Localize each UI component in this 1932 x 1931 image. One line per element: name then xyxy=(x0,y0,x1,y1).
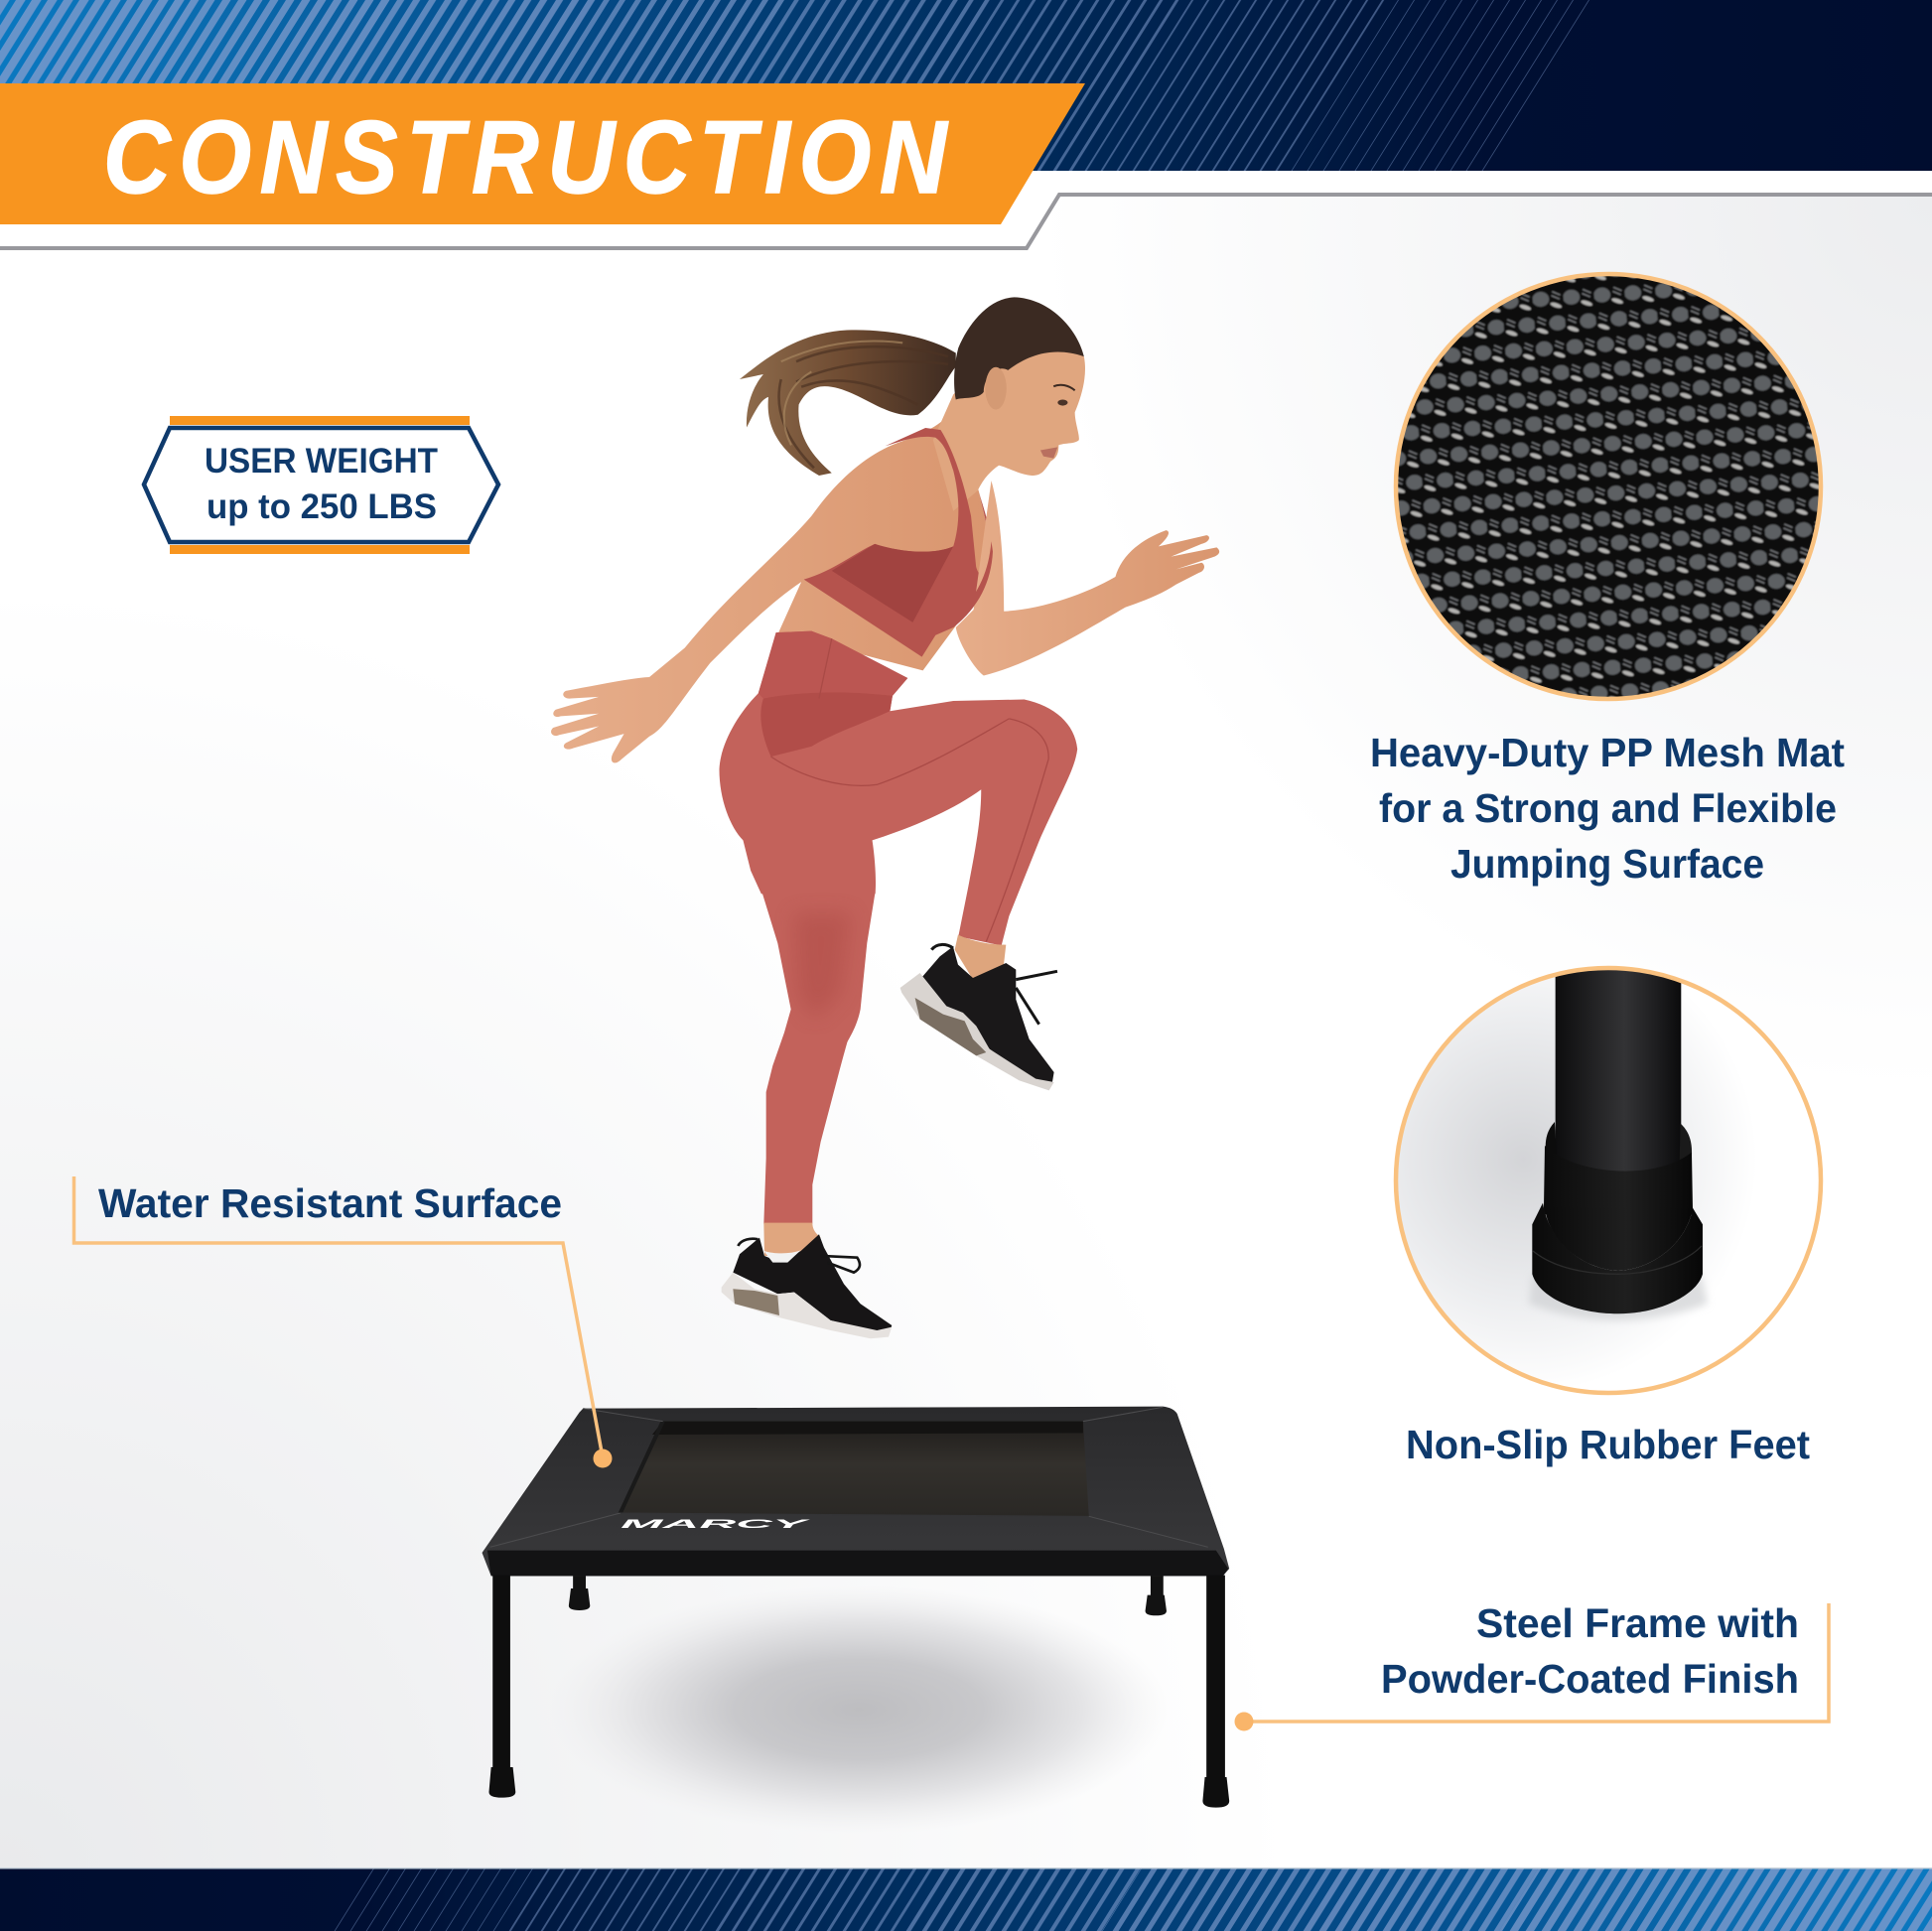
label: mesh mat: Jumping Surface xyxy=(1450,841,1764,887)
badge: user weight xyxy=(144,416,498,554)
label: mesh mat: Heavy-Duty PP Mesh Mat xyxy=(1370,730,1845,775)
label: steel frame: Powder-Coated Finish xyxy=(1381,1656,1799,1702)
footer banner with diagonal stripes xyxy=(0,1867,1932,1931)
trampoline: MARCY xyxy=(621,1517,810,1531)
badge: user weight: USER WEIGHT xyxy=(205,442,438,481)
label: steel frame xyxy=(1381,1600,1799,1702)
woman jumping xyxy=(551,297,1219,1338)
callout dot: steel frame xyxy=(1235,1712,1253,1731)
badge: user weight: up to 250 LBS xyxy=(207,487,437,526)
callout line: water resistant surface xyxy=(73,1176,603,1457)
title ribbon xyxy=(0,83,1085,224)
label: rubber feet: Non-Slip Rubber Feet xyxy=(1406,1422,1810,1467)
trampoline xyxy=(483,1407,1229,1808)
detail circle: rubber foot xyxy=(1396,963,1821,1393)
label: mesh mat xyxy=(1370,730,1845,887)
label: mesh mat: for a Strong and Flexible xyxy=(1379,785,1837,831)
label: steel frame: Steel Frame with xyxy=(1476,1600,1799,1646)
white band below header xyxy=(0,83,1932,249)
detail circle: mesh mat xyxy=(1390,268,1827,705)
label: water resistant surface: Water Resistant Surface xyxy=(98,1180,562,1226)
header banner with diagonal stripes xyxy=(0,0,1932,171)
title: CONSTRUCTION xyxy=(103,98,949,214)
callout line: steel frame xyxy=(1244,1603,1829,1722)
header rule xyxy=(0,195,1932,248)
callout dot: water resistant surface xyxy=(594,1449,612,1467)
floor shadow xyxy=(549,1586,1169,1834)
